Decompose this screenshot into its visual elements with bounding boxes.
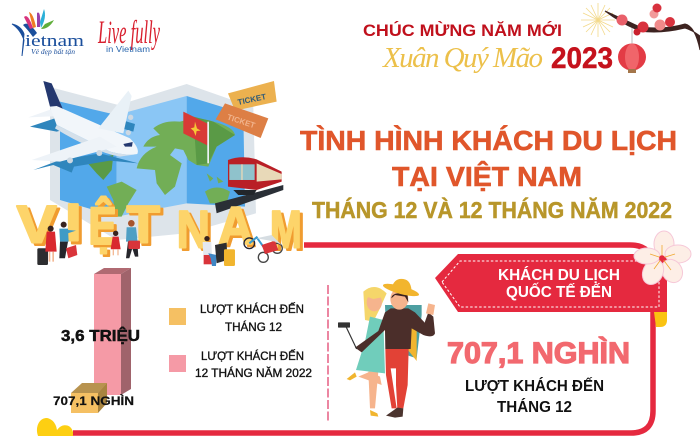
legend label: December	[200, 301, 304, 334]
legend	[169, 301, 312, 380]
logo: Vietnam tourism: ietnam	[25, 31, 84, 50]
logo: Vietnam tourism	[12, 9, 84, 56]
3D letters	[17, 194, 305, 262]
caption: visitors in December	[465, 378, 604, 416]
illustration: world map, plane, train and VIỆT NAM	[17, 81, 305, 266]
3D letters: M	[273, 203, 305, 262]
legend label: December: LƯỢT KHÁCH ĐẾN	[200, 301, 304, 316]
key figure: 707.1 thousand: 707,1 NGHÌN	[447, 336, 630, 370]
logo: Live fully in Vietnam: in Vietnam	[106, 45, 150, 54]
script: Xuan Quy Mao: Xuân Quý Mão	[382, 42, 543, 74]
bar: December	[71, 383, 107, 413]
ribbon: international visitors: KHÁCH DU LỊCH	[498, 265, 620, 284]
continents	[85, 117, 235, 217]
tickets: TICKET	[226, 113, 256, 130]
ribbon: international visitors: QUỐC TẾ ĐẾN	[506, 281, 612, 301]
3D letters: I	[68, 196, 85, 255]
icon: blossom branch	[605, 4, 700, 50]
map frame	[50, 84, 256, 240]
travellers left	[37, 220, 140, 265]
plane	[28, 81, 138, 173]
caption: visitors in December: THÁNG 12	[497, 399, 572, 416]
main title	[300, 125, 677, 192]
3D letters: I	[65, 194, 82, 253]
3D letters: N	[180, 203, 213, 262]
logo: Vietnam tourism: Vẻ đẹp bất tận	[31, 48, 76, 56]
3D letters: A	[221, 200, 256, 259]
legend label: 12 months	[195, 348, 312, 380]
bar chart: visitors	[53, 268, 140, 413]
flag	[183, 112, 209, 163]
3D letters: N	[177, 200, 210, 259]
dashed divider	[327, 285, 329, 422]
ribbon: international visitors	[435, 254, 667, 312]
legend swatch: 12 months	[169, 355, 186, 372]
ribbon fold	[654, 312, 667, 327]
3D letters: M	[270, 200, 302, 259]
3D letters: Ệ	[88, 197, 117, 256]
icon: lantern	[618, 28, 646, 73]
cyclo	[244, 235, 282, 262]
3D letters: Ệ	[91, 200, 120, 259]
main title: TẠI VIỆT NAM	[392, 161, 582, 192]
travellers right	[203, 236, 235, 266]
logo: Live fully in Vietnam: Live fully	[97, 15, 160, 51]
legend swatch: December	[169, 308, 186, 325]
icon: fireworks	[581, 3, 615, 37]
3D letters: T	[130, 198, 163, 257]
3D letters: T	[127, 195, 160, 254]
legend label: 12 months: LƯỢT KHÁCH ĐẾN	[201, 348, 304, 363]
train	[215, 157, 283, 213]
man	[355, 279, 435, 418]
3D letters: V	[17, 195, 57, 254]
logo: Live fully in Vietnam	[97, 15, 160, 54]
caption: visitors in December: LƯỢT KHÁCH ĐẾN	[465, 378, 604, 395]
illustration: couple taking selfie	[338, 279, 435, 418]
bar: 12 months	[94, 268, 131, 395]
main title: TÌNH HÌNH KHÁCH DU LỊCH	[300, 125, 677, 156]
tickets: TICKET	[237, 92, 267, 107]
icon: blossom flower	[634, 231, 691, 288]
value: 3,6 million: 3,6 TRIỆU	[61, 327, 140, 345]
New year greeting: CHÚC MỪNG NĂM MỚI	[363, 21, 562, 40]
panel: international visitors frame	[73, 245, 653, 433]
selfie stick	[338, 322, 357, 349]
tickets	[216, 81, 277, 138]
year 2023: 2023	[551, 42, 613, 75]
icon: yellow flower	[35, 417, 76, 436]
woman	[347, 287, 387, 417]
3D letters: A	[218, 197, 253, 256]
legend label: 12 months: 12 THÁNG NĂM 2022	[195, 365, 312, 380]
value: 707.1 thousand: 707,1 NGHÌN	[53, 393, 134, 408]
subtitle: THÁNG 12 VÀ 12 THÁNG NĂM 2022	[312, 196, 672, 223]
3D letters: V	[20, 198, 60, 257]
legend label: December: THÁNG 12	[225, 319, 282, 334]
